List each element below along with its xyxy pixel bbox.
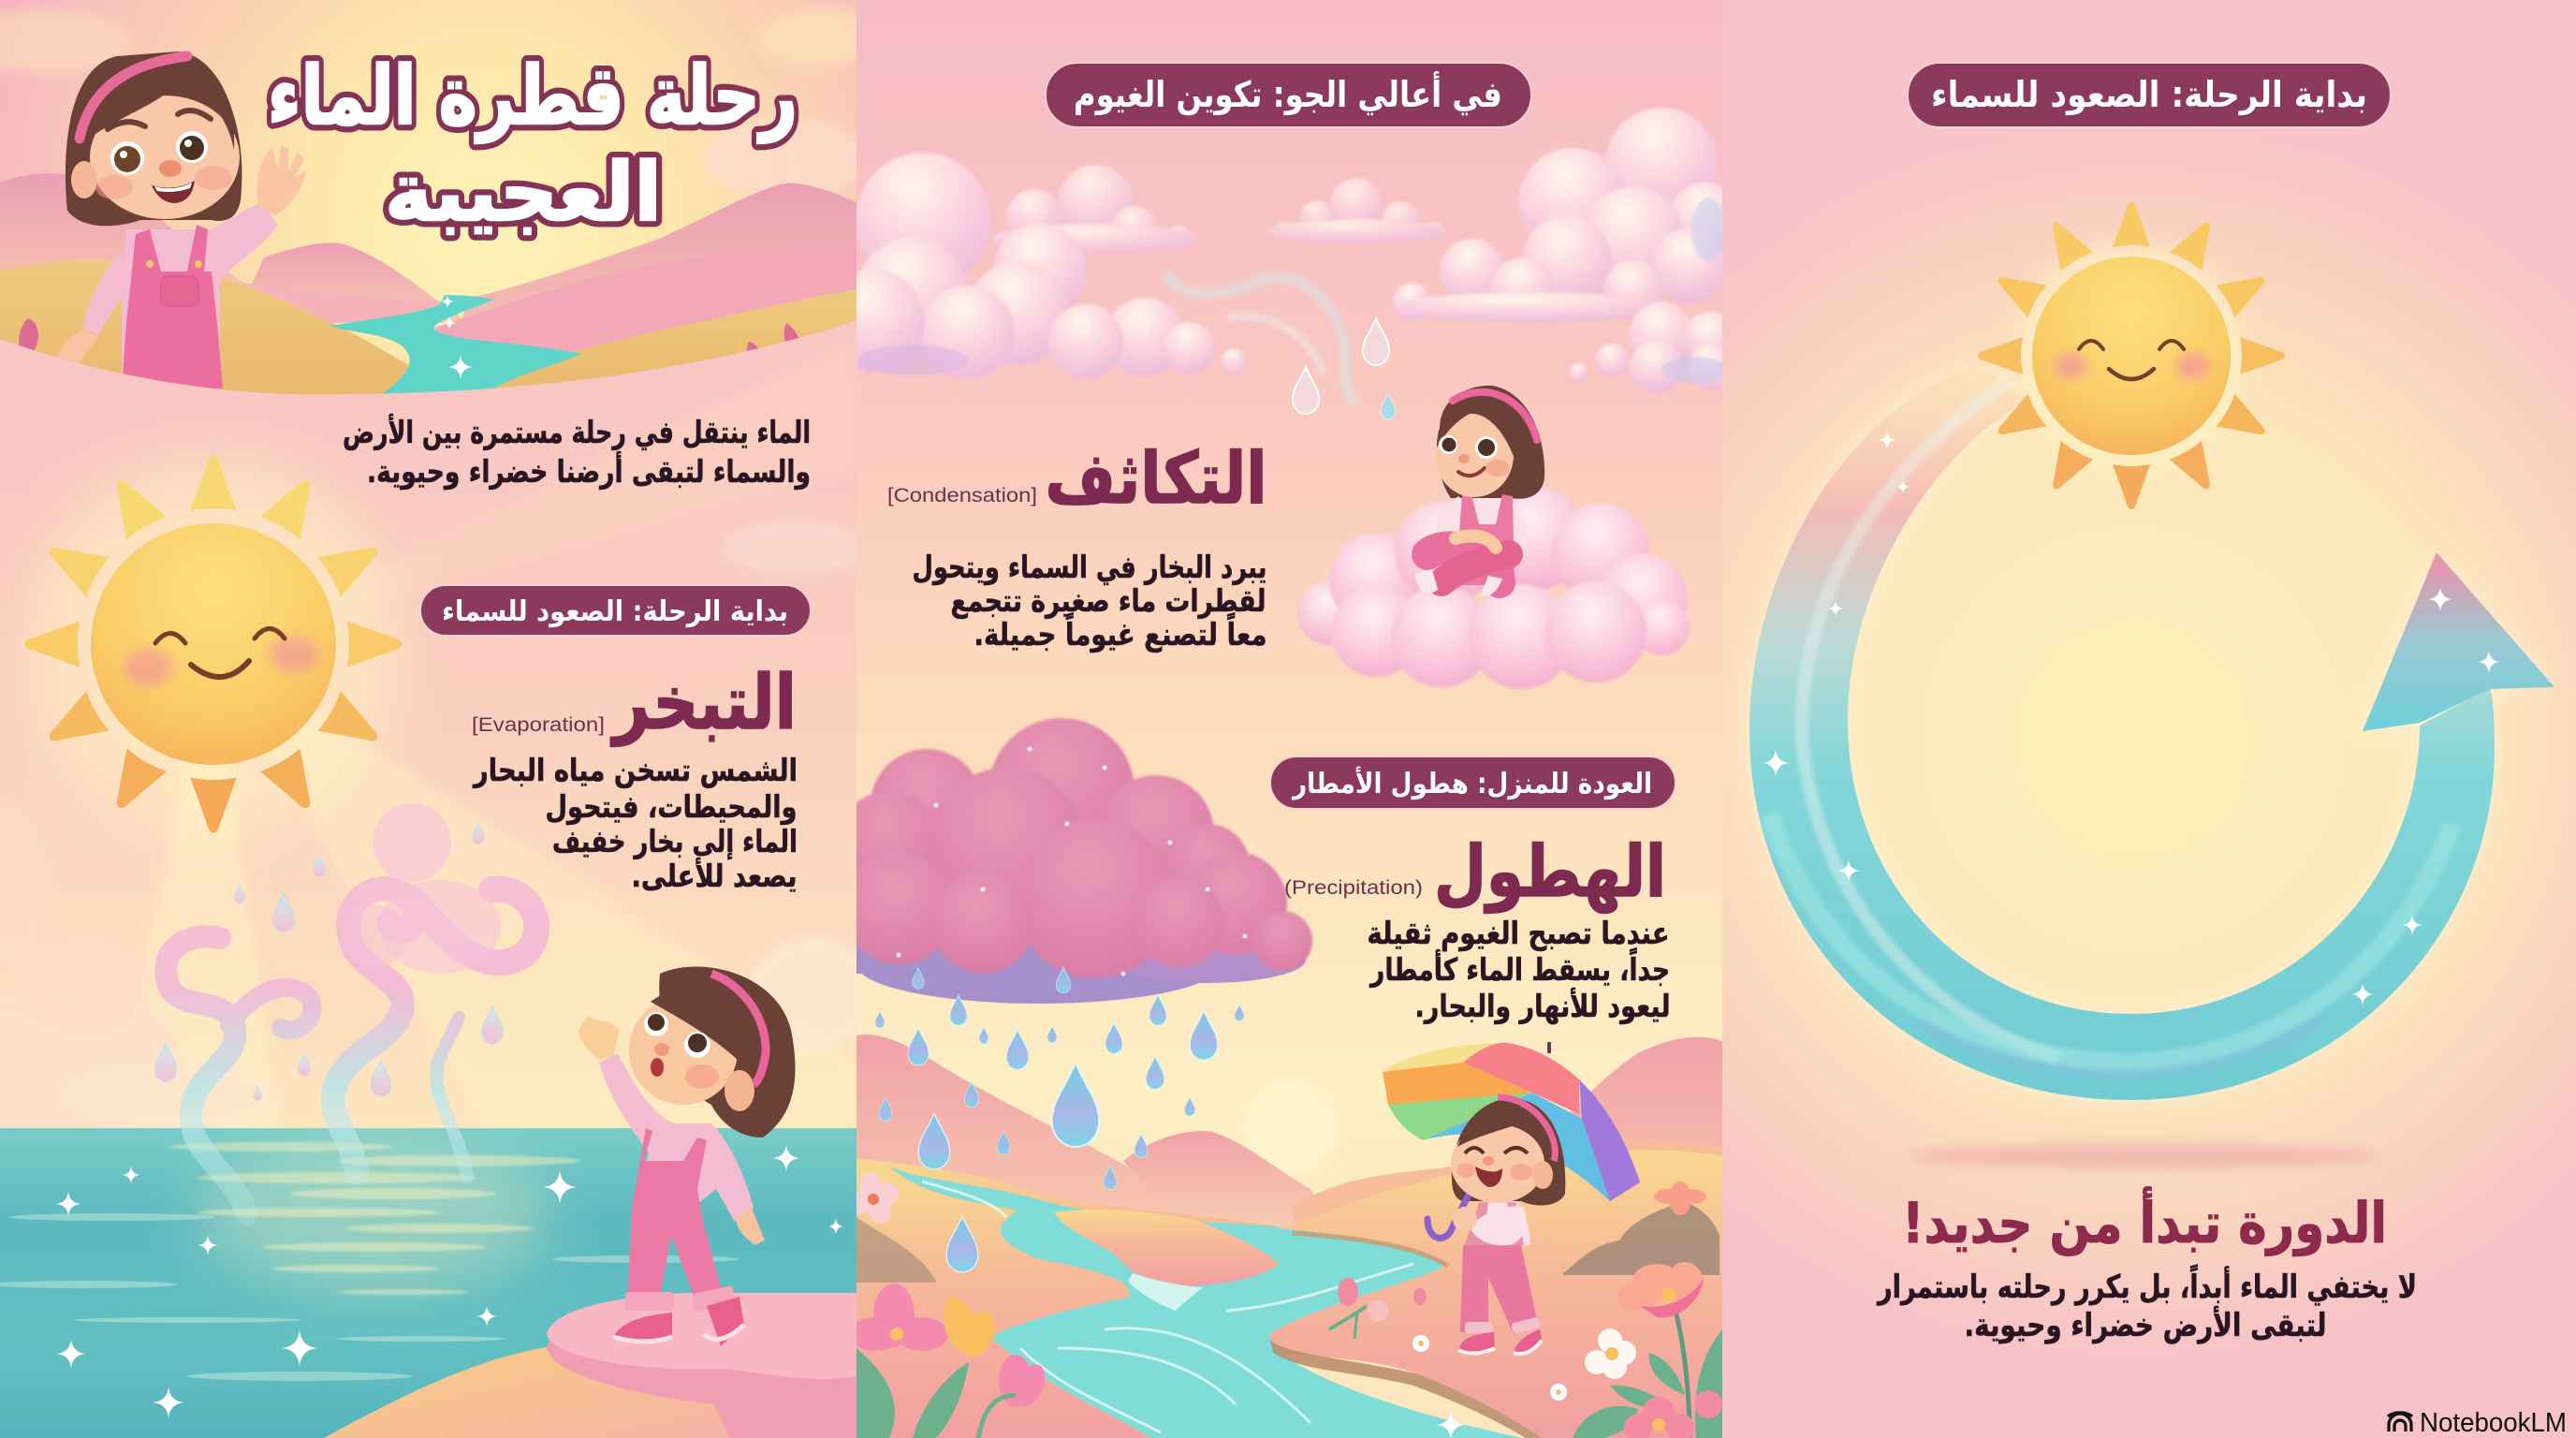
- icon: rainbow umbrella: [1383, 1042, 1640, 1201]
- text: evaporation description: [472, 752, 798, 894]
- ground shadow: [1910, 1144, 2378, 1168]
- heading: precipitation: (Precipitation): [1284, 877, 1423, 899]
- title scene background: [0, 0, 889, 403]
- platform and sand: [324, 1293, 856, 1438]
- text: condensation description: معاً لتصنع غيوماً جميلة.: [973, 612, 1267, 653]
- text: evaporation description: يصعد للأعلى.: [631, 857, 798, 894]
- text: evaporation description: الماء إلى بخار خفيف: [552, 823, 798, 860]
- heading: evaporation: [474, 670, 792, 747]
- heading: evaporation: [Evaporation]: [472, 714, 605, 736]
- heading: precipitation: الهطول: [1434, 829, 1666, 914]
- pill: cycle label: بداية الرحلة: الصعود للسماء: [1931, 74, 2367, 115]
- icon: small vapor droplets: [155, 823, 503, 1101]
- text: condensation description: لقطرات ماء صغيرة تتجمع: [951, 582, 1266, 620]
- text: condensation description: يبرد البخار في السماء ويتحول: [912, 549, 1267, 586]
- character: girl looking up: [578, 966, 796, 1346]
- title: [268, 50, 798, 240]
- panel: title scene and evaporation: [0, 0, 889, 1438]
- logo: NotebookLM: NotebookLM: [2420, 1408, 2567, 1438]
- pill: cycle label: [1908, 63, 2391, 127]
- icon: cotton clouds: [822, 108, 1743, 393]
- text: evaporation description: الشمس تسخن مياه البحار: [472, 752, 798, 789]
- text: evaporation description: والمحيطات، فيتحول: [545, 788, 798, 826]
- pill: clouds section label: في أعالي الجو: تكوين الغيوم: [1074, 71, 1502, 116]
- intro text: والسماء لتبقى أرضنا خضراء وحيوية.: [367, 451, 811, 491]
- text: precipitation description: ليعود للأنهار والبحار.: [1415, 987, 1670, 1025]
- panel: clouds and rain: [856, 62, 1722, 1438]
- heading: the cycle starts again: الدورة تبدأ من جديد!: [1902, 1186, 2387, 1256]
- icon: rain cloud: [838, 718, 1312, 1004]
- heading: precipitation: [1284, 829, 1666, 914]
- intro text: الماء ينتقل في رحلة مستمرة بين الأرض: [343, 413, 811, 451]
- pill: rain section label: العودة للمنزل: هطول الأمطار: [1291, 766, 1652, 800]
- text: precipitation description: [1367, 915, 1670, 1025]
- icon: condensing wisp and droplets: [1165, 271, 1396, 419]
- text: cycle description: لتبقى الأرض خضراء وحيوية.: [1964, 1305, 2327, 1344]
- chart: circular water-cycle arrow: [1749, 363, 2554, 1100]
- text: precipitation description: عندما تصبح الغيوم ثقيلة: [1367, 915, 1670, 952]
- character: girl on cloud: [1415, 386, 1544, 595]
- heading: condensation: [889, 448, 1263, 506]
- icon: flowers: [848, 1173, 1722, 1438]
- panel: cycle restarts: [1722, 0, 2576, 1438]
- text: cycle description: لا يختفي الماء أبداً، بل يكرر رحلته باستمرار: [1876, 1264, 2417, 1306]
- pill: evaporation section label: بداية الرحلة: الصعود للسماء: [442, 595, 788, 628]
- text: cycle description: [1876, 1264, 2417, 1344]
- pill: rain section label: [1270, 756, 1676, 809]
- character: waving girl: [54, 51, 306, 389]
- text: precipitation description: جداً، يسقط الماء كأمطار: [1368, 947, 1670, 988]
- pill: clouds section label: [1046, 63, 1531, 127]
- character: girl with rainbow umbrella: [1383, 1042, 1640, 1355]
- text: condensation description: [912, 549, 1267, 653]
- title: العجيبة: [385, 146, 662, 240]
- sea: [0, 1128, 856, 1438]
- title: رحلة قطرة الماء: [268, 50, 798, 143]
- heading: evaporation: التبخر: [610, 659, 797, 747]
- heading: condensation: [Condensation]: [887, 485, 1037, 506]
- title: العجيبة: [385, 146, 662, 240]
- title: رحلة قطرة الماء: [268, 50, 798, 143]
- icon: raindrops: [875, 967, 1244, 1272]
- pill: evaporation section label: [420, 585, 811, 636]
- intro text: [343, 413, 811, 491]
- icon: pink cloud seat: [1297, 487, 1690, 689]
- landscape: hills and river: [856, 1034, 1722, 1438]
- icon: river: [329, 295, 582, 403]
- heading: condensation: التكاثف: [1045, 436, 1267, 520]
- icon: rising water vapor: [166, 803, 536, 1214]
- icon: smiling sun: [24, 455, 402, 833]
- icon: smiling sun: [1978, 202, 2285, 509]
